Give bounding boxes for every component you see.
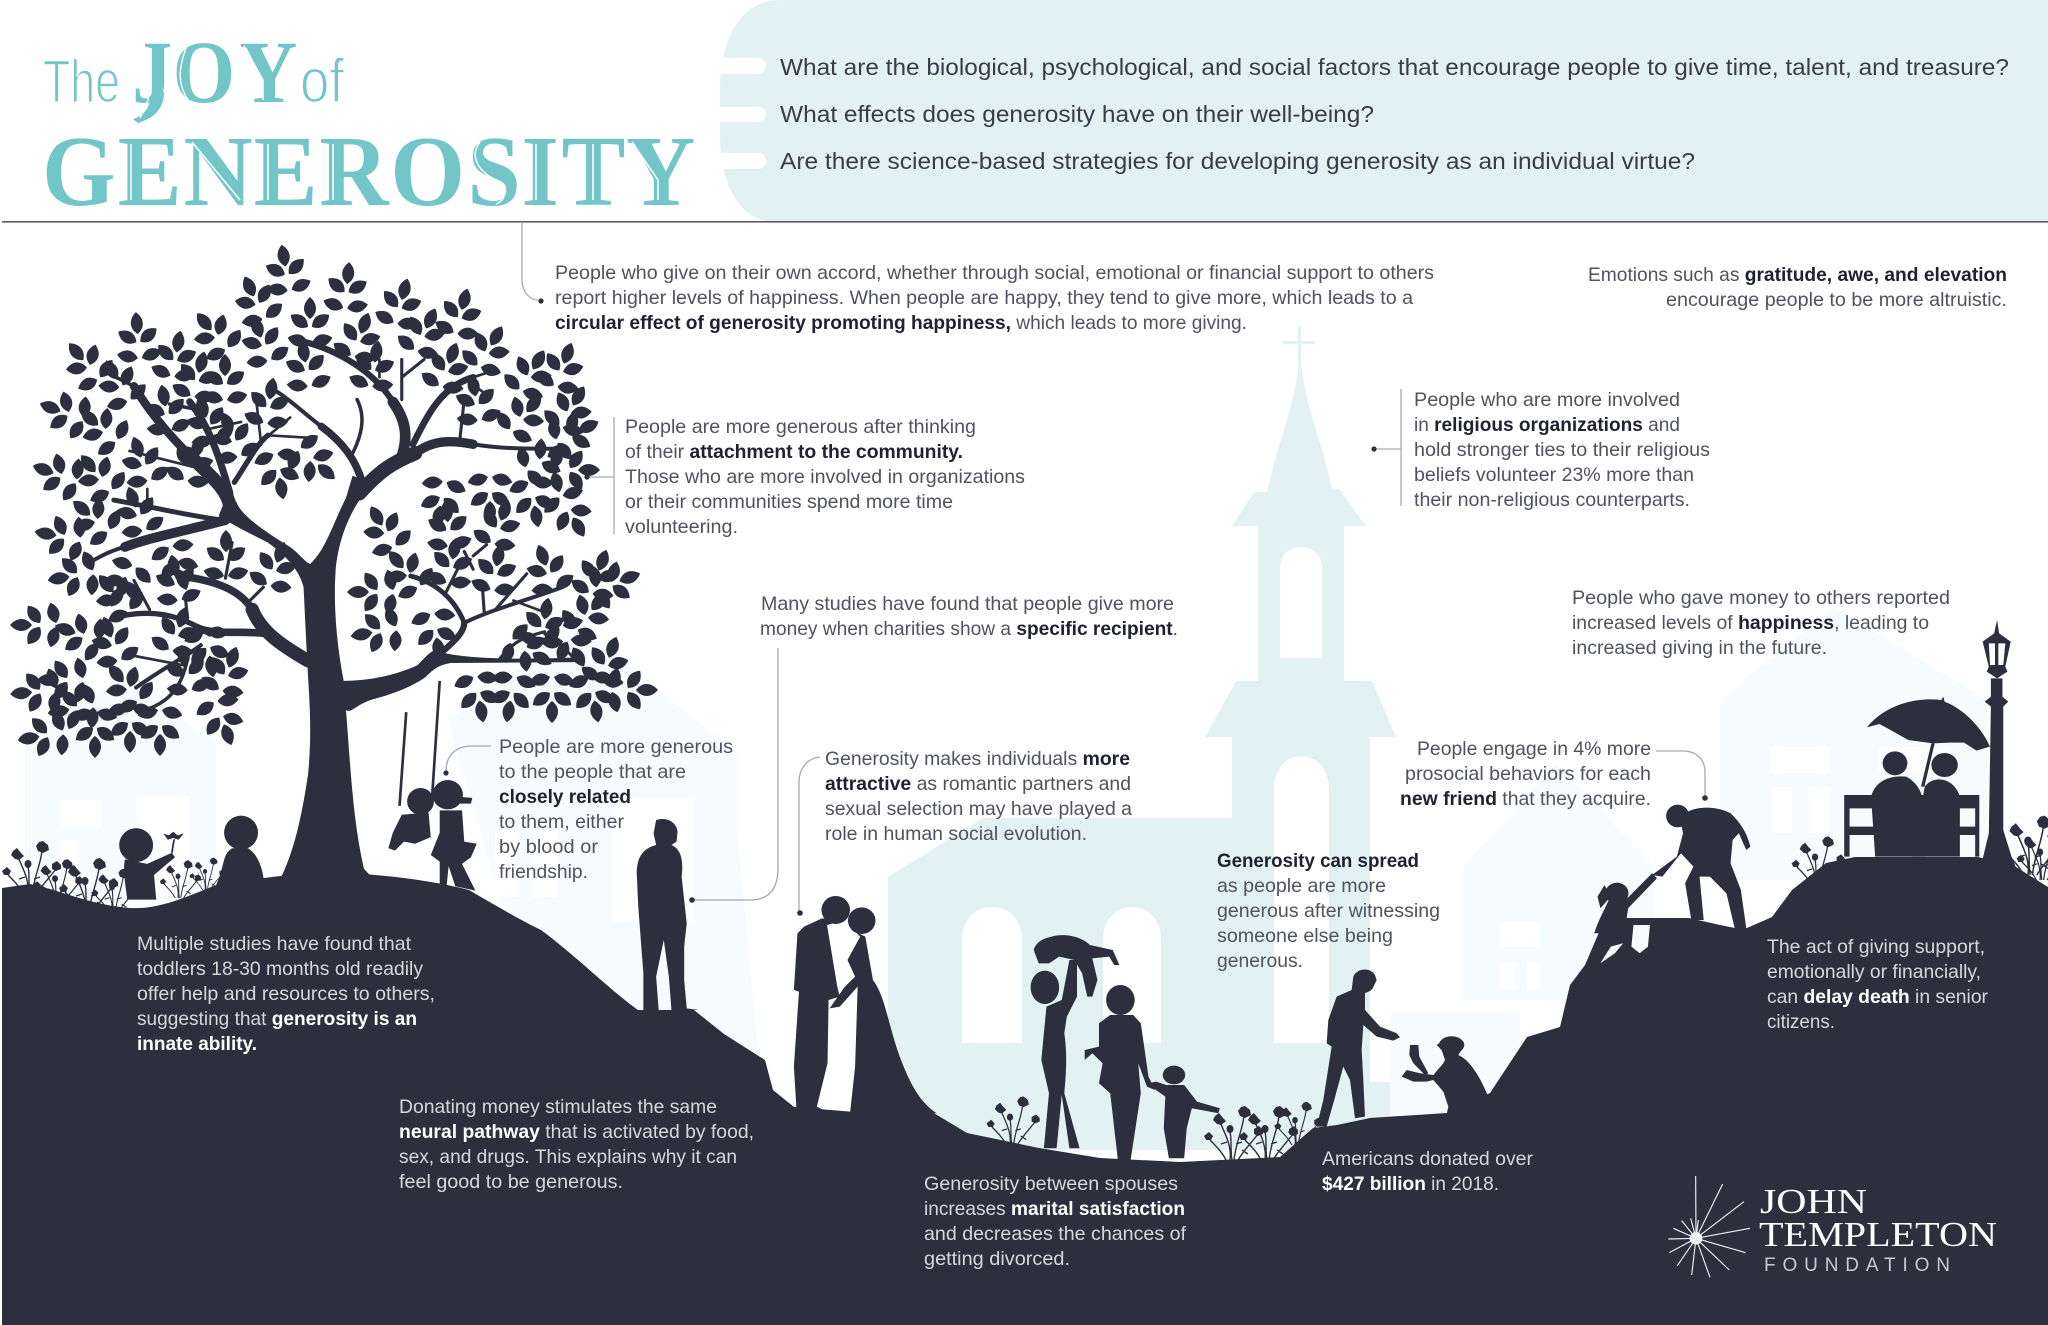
callout: religious organizations: beliefs volunteer 23% more than <box>1414 464 1694 486</box>
title: The <box>43 48 120 115</box>
text: donations total <box>1322 1148 1533 1195</box>
title <box>41 24 695 228</box>
callout: emotions: encourage people to be more altruistic. <box>1666 289 2007 311</box>
callout: attractive <box>797 748 1132 916</box>
callout: community: of their attachment to the community. <box>625 441 963 463</box>
questions: What are the biological, psychological, and social factors that encourage people to give time, talent, and treasure? <box>780 54 2009 80</box>
callout: specific recipient: Many studies have found that people give more <box>761 593 1174 615</box>
ground silhouette <box>2 857 2048 1325</box>
callout: emotions <box>1588 264 2007 311</box>
logo: John Templeton Foundation: TEMPLETON <box>1759 1215 1997 1254</box>
figures: couple on bench <box>1844 697 1990 857</box>
text: marital satisfaction: and decreases the chances of <box>924 1223 1187 1245</box>
title: JOY <box>132 24 297 122</box>
flowers: left <box>2 841 225 912</box>
callout: religious organizations: People who are more involved <box>1414 389 1680 411</box>
text: toddlers: offer help and resources to others, <box>137 983 435 1005</box>
callout: religious organizations: their non-religious counterparts. <box>1414 489 1690 511</box>
text: toddlers: innate ability. <box>137 1033 257 1055</box>
text: toddlers: toddlers 18-30 months old readily <box>137 958 423 980</box>
text: delay death: The act of giving support, <box>1767 936 1985 958</box>
logo: John Templeton Foundation <box>1668 1176 1997 1277</box>
callout: happiness circle <box>522 222 1434 334</box>
callout: attractive: attractive as romantic partners and <box>825 773 1131 795</box>
callout: closely related: closely related <box>499 786 631 808</box>
text: donations total: Americans donated over <box>1322 1148 1533 1170</box>
callout: emotions: Emotions such as gratitude, awe, and elevation <box>1588 264 2007 286</box>
logo: John Templeton Foundation: JOHN <box>1760 1182 1867 1221</box>
callout: generosity can spread: generous after witnessing <box>1217 900 1440 922</box>
callout: closely related: People are more generous <box>499 736 733 758</box>
text: toddlers: Multiple studies have found that <box>137 933 412 955</box>
callout: new friend: People engage in 4% more <box>1417 738 1651 760</box>
logo: John Templeton Foundation: FOUNDATION <box>1764 1255 1950 1276</box>
callout: community: People are more generous after thinking <box>625 416 976 438</box>
callout: happiness from giving money <box>1572 587 1950 659</box>
callout: closely related: to the people that are <box>499 761 686 783</box>
callout: community: Those who are more involved in organizations <box>625 466 1025 488</box>
question panel <box>700 0 2048 222</box>
background house: left <box>25 676 216 900</box>
callout: generosity can spread: as people are more <box>1217 875 1386 897</box>
title: GENEROSITY <box>41 116 695 228</box>
callout: generosity can spread: generous. <box>1217 950 1303 972</box>
text: delay death: emotionally or financially, <box>1767 961 1981 983</box>
flowers: valley <box>987 1096 1321 1160</box>
text: neural pathway: neural pathway that is activated by food, <box>399 1121 754 1143</box>
callout: closely related: friendship. <box>499 861 588 883</box>
church <box>888 326 1396 1150</box>
text: marital satisfaction: increases marital satisfaction <box>924 1198 1185 1220</box>
callout: closely related <box>443 736 733 883</box>
callout: community <box>584 416 1025 538</box>
background house: right <box>1720 607 1987 880</box>
tree leaves <box>8 241 658 764</box>
callout: community: or their communities spend more time <box>625 491 953 513</box>
questions: Are there science-based strategies for developing generosity as an individual virtue? <box>780 148 1695 174</box>
callout: attractive: sexual selection may have played a <box>825 798 1132 820</box>
text: marital satisfaction <box>924 1173 1187 1270</box>
figures: children on swing <box>388 681 477 891</box>
text: marital satisfaction: Generosity between spouses <box>924 1173 1178 1195</box>
text: donations total: $427 billion in 2018. <box>1322 1173 1499 1195</box>
flowers: right hill <box>1792 816 2048 885</box>
text: marital satisfaction: getting divorced. <box>924 1248 1070 1270</box>
callout: happiness circle: report higher levels of happiness. When people are happy, they tend to give more, which leads to a <box>555 287 1413 309</box>
callout: attractive: Generosity makes individuals more <box>825 748 1130 770</box>
callout: generosity can spread: Generosity can spread <box>1217 850 1419 872</box>
callout: happiness from giving money: increased levels of happiness, leading to <box>1572 612 1929 634</box>
callout: religious organizations <box>1371 389 1710 511</box>
callout: religious organizations: in religious organizations and <box>1414 414 1680 436</box>
background house: centre-right <box>1390 763 1654 1117</box>
callout: religious organizations: hold stronger ties to their religious <box>1414 439 1710 461</box>
callout: generosity can spread: someone else being <box>1217 925 1393 947</box>
figure: man giving to kneeling person <box>1317 970 1489 1127</box>
callout: new friend: prosocial behaviors for each <box>1405 763 1651 785</box>
callout: specific recipient <box>689 593 1178 903</box>
callout: generosity can spread <box>1217 850 1440 972</box>
callout: new friend: new friend that they acquire. <box>1400 788 1651 810</box>
street lamp <box>1978 620 2020 877</box>
figure: standing man <box>637 819 699 1010</box>
callout: new friend <box>1400 738 1708 810</box>
callout: happiness from giving money: increased giving in the future. <box>1572 637 1827 659</box>
text: neural pathway: sex, and drugs. This explains why it can <box>399 1146 737 1168</box>
questions: What effects does generosity have on their well-being? <box>780 101 1374 127</box>
text: neural pathway: Donating money stimulates the same <box>399 1096 717 1118</box>
background house: centre-left <box>448 625 760 1070</box>
text: toddlers: suggesting that generosity is an <box>137 1008 417 1030</box>
callout: community: volunteering. <box>625 516 738 538</box>
callout: happiness from giving money: People who gave money to others reported <box>1572 587 1950 609</box>
callout: closely related: by blood or <box>499 836 599 858</box>
title: of <box>300 47 345 116</box>
tree <box>8 241 658 926</box>
callout: closely related: to them, either <box>499 811 624 833</box>
text: delay death: can delay death in senior <box>1767 986 1988 1008</box>
questions <box>780 54 2009 174</box>
text: neural pathway <box>399 1096 754 1193</box>
callout: happiness circle: circular effect of generosity promoting happiness, which leads to more giving. <box>555 312 1247 334</box>
callout: attractive: role in human social evolution. <box>825 823 1087 845</box>
text: delay death: citizens. <box>1767 1011 1835 1033</box>
icon: starburst <box>1668 1176 1750 1277</box>
callout: specific recipient: money when charities show a specific recipient. <box>760 618 1178 640</box>
figures: toddlers <box>119 816 264 900</box>
callout: happiness circle: People who give on their own accord, whether through social, emotional or financial support to others <box>555 262 1434 284</box>
header rule <box>2 221 2048 223</box>
tree trunk and branches <box>87 342 576 926</box>
figure: family <box>1031 935 1220 1160</box>
figure: adult helping girl climb <box>1594 805 1750 963</box>
text: delay death <box>1767 936 1988 1033</box>
figure: kissing couple <box>794 896 937 1113</box>
text: neural pathway: feel good to be generous. <box>399 1171 623 1193</box>
text: toddlers <box>137 933 435 1055</box>
